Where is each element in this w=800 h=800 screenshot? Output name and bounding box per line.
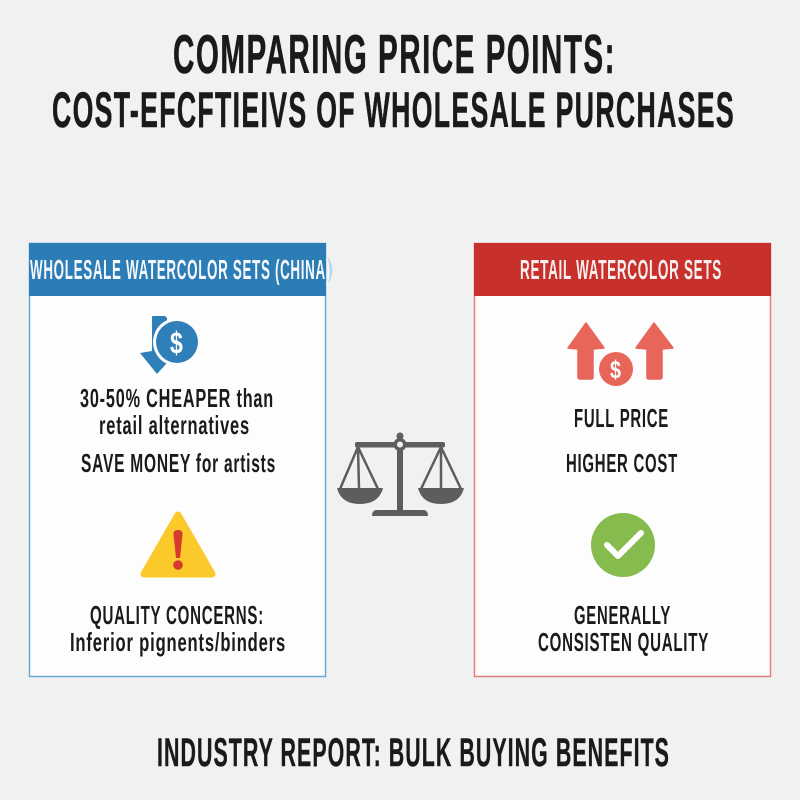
quality concerns text [70,600,286,657]
title [52,23,735,138]
cheaper text [80,383,274,440]
quality concerns text: QUALITY CONCERNS: [90,600,264,630]
panel: retail watercolor sets [474,243,771,676]
higher cost text: HIGHER COST [566,448,678,478]
icon: down arrow with dollar coin: $ [170,325,184,360]
text: WHOLESALE WATERCOLOR SETS (CHINA) [30,254,331,285]
save money text: SAVE MONEY for artists [81,448,276,478]
consistent quality text: GENERALLY [574,600,671,630]
wholesale header bar [29,243,326,296]
icon: up arrows with dollar coin: $ [610,356,622,384]
icon: green check [591,513,655,577]
icon: up arrows with dollar coin [568,323,673,388]
icon: down arrow with dollar coin [140,316,201,374]
quality concerns text: Inferior pignents/binders [70,627,286,657]
consistent quality text [538,600,709,657]
cheaper text: 30-50% CHEAPER than [80,383,274,413]
retail header bar [474,243,771,296]
icon: warning triangle [144,515,212,574]
full price text: FULL PRICE [574,403,669,433]
cheaper text: retail alternatives [99,410,250,440]
panel: wholesale watercolor sets [29,243,331,676]
icon: balance scale [337,432,464,516]
